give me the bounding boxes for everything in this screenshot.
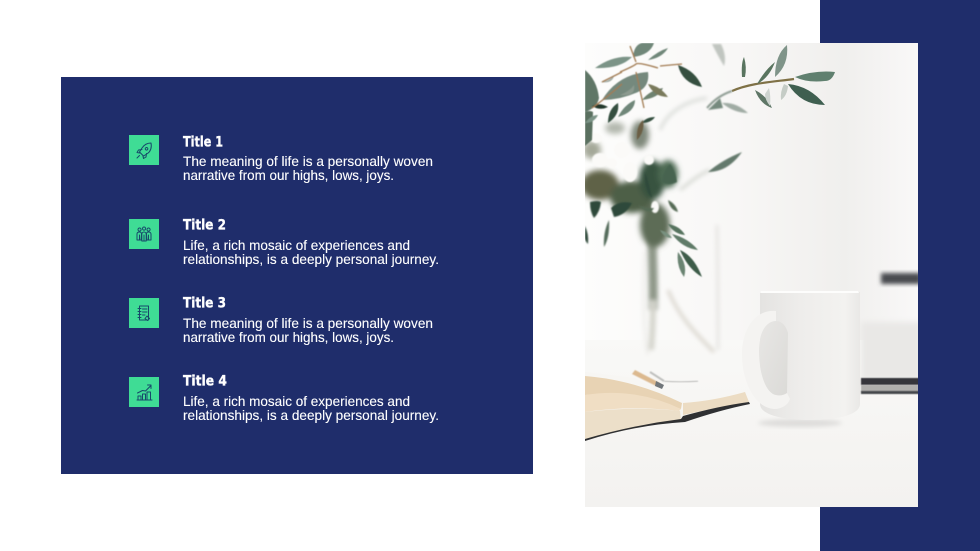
item 3 <box>129 296 433 345</box>
heading: Title 3: Title 3 <box>183 296 226 312</box>
text: item 1 description: narrative from our highs, lows, joys. <box>183 168 394 183</box>
text: item 4 description <box>183 394 439 423</box>
white mug <box>759 291 860 418</box>
navy side band <box>820 0 980 551</box>
item 4 <box>129 374 439 423</box>
text: item 2 description: Life, a rich mosaic of experiences and <box>183 238 410 253</box>
icon: notebook <box>129 298 159 328</box>
heading: Title 4: Title 4 <box>183 374 227 390</box>
blurred foliage cluster <box>581 121 678 247</box>
blurred dark object on the right <box>881 273 921 284</box>
white bokeh in foliage <box>590 133 659 213</box>
dark blurred leaves <box>585 152 742 247</box>
lower leaves <box>660 224 702 277</box>
icon: growth chart <box>129 377 159 407</box>
icon: group of people <box>129 219 159 249</box>
text: item 3 description: narrative from our highs, lows, joys. <box>183 330 394 345</box>
heading: Title 2: Title 2 <box>183 218 226 234</box>
laptop on the right <box>861 322 921 394</box>
text: item 2 description <box>183 238 439 267</box>
navy content panel <box>61 77 533 474</box>
icon: rocket <box>129 135 159 165</box>
heading: Title 1: Title 1 <box>183 134 223 150</box>
photo: plant, mug and open book on a desk <box>581 43 921 507</box>
mug shadow <box>758 419 842 427</box>
desk surface <box>585 433 682 507</box>
pencil on the book <box>632 370 698 389</box>
glass vase <box>666 226 720 354</box>
item 2 <box>129 218 439 267</box>
mug handle <box>760 311 790 409</box>
top-left leaves and twigs <box>585 43 725 146</box>
text: item 2 description: relationships, is a deeply personal journey. <box>183 252 439 267</box>
text: item 3 description <box>183 316 433 345</box>
item 1 <box>129 134 433 183</box>
text: item 3 description: The meaning of life is a personally woven <box>183 316 433 331</box>
text: item 4 description: relationships, is a deeply personal journey. <box>183 408 439 423</box>
text: item 1 description: The meaning of life is a personally woven <box>183 154 433 169</box>
upper-right branch with sharp leaves <box>707 45 835 113</box>
plant stem, blurred <box>651 98 710 350</box>
text: item 4 description: Life, a rich mosaic of experiences and <box>183 394 410 409</box>
open book <box>585 372 753 441</box>
text: item 1 description <box>183 154 433 183</box>
